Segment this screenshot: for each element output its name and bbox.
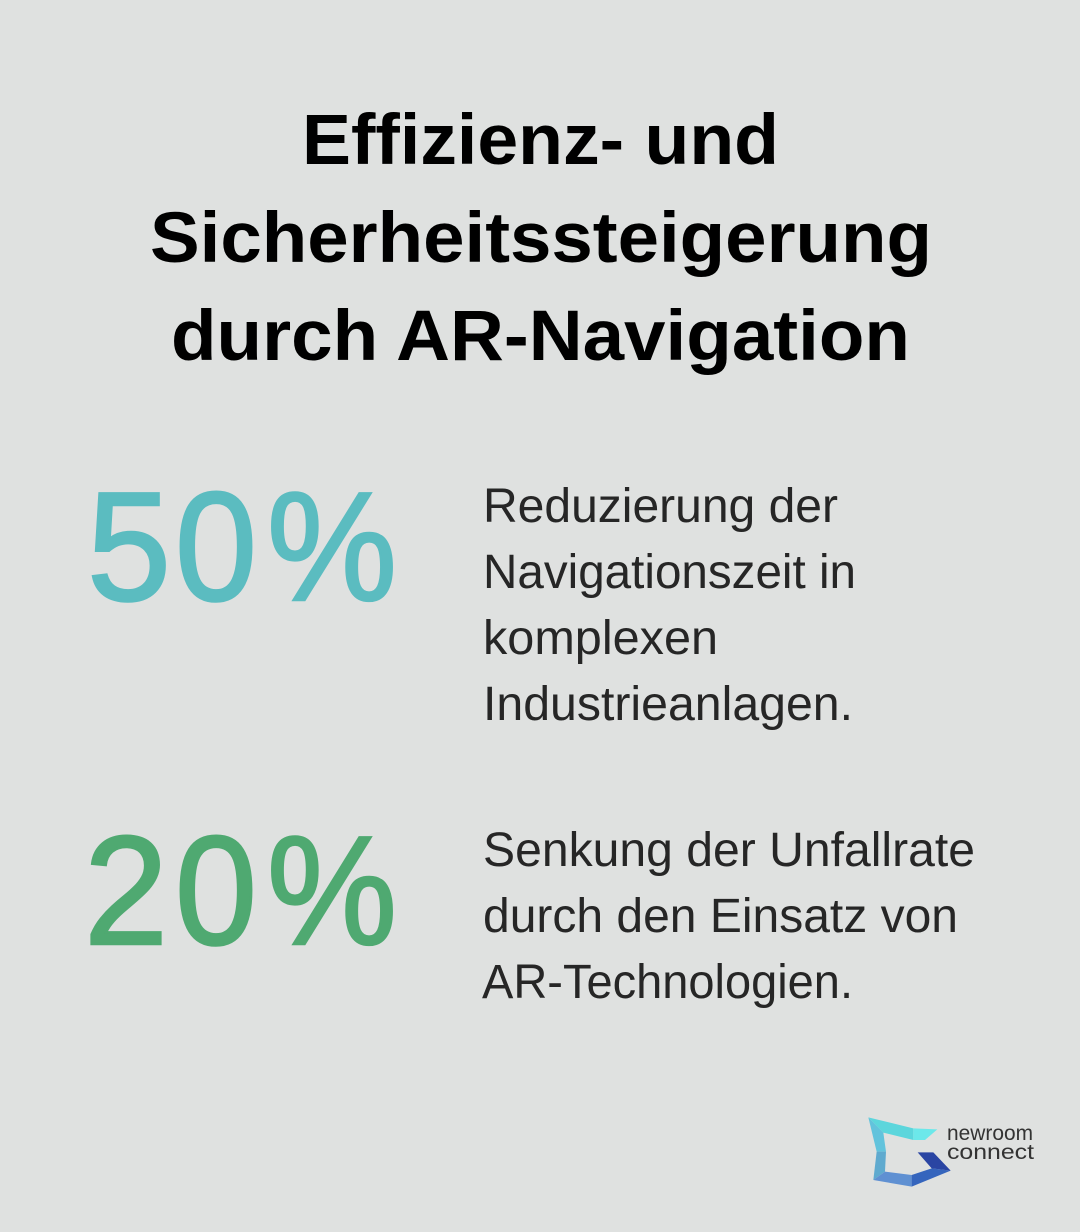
text block: 20% description: durch den Einsatz von (483, 890, 958, 943)
wordmark: newroom (947, 1122, 1033, 1145)
statistic: 20%: % (267, 804, 397, 977)
statistic: 20%: 2 (84, 804, 168, 977)
statistic: 50% (87, 460, 397, 633)
text block: 20% description: Senkung der Unfallrate (483, 824, 975, 877)
statistic: 20% (84, 804, 397, 977)
text block: 50% description (483, 480, 856, 731)
icon: logo mark (868, 1117, 951, 1187)
wordmark: connect (947, 1141, 1034, 1164)
text block: 50% description: komplexen (483, 612, 718, 665)
statistic: 50%: 5 (87, 460, 171, 633)
statistic: 50%: % (267, 460, 397, 633)
title (150, 101, 932, 376)
text block: 50% description: Industrieanlagen. (483, 678, 853, 731)
statistic: 20%: 0 (175, 804, 257, 977)
title: Effizienz- und (302, 101, 779, 180)
statistic: 50%: 0 (175, 460, 257, 633)
wordmark (947, 1122, 1034, 1164)
text block: 20% description (482, 824, 975, 1009)
text block: 20% description: AR-Technologien. (482, 956, 853, 1009)
title: Sicherheitssteigerung (150, 199, 932, 278)
text block: 50% description: Reduzierung der (483, 480, 838, 533)
title: durch AR-Navigation (171, 297, 910, 376)
text block: 50% description: Navigationszeit in (483, 546, 856, 599)
logo: newroom connect (868, 1117, 1034, 1187)
